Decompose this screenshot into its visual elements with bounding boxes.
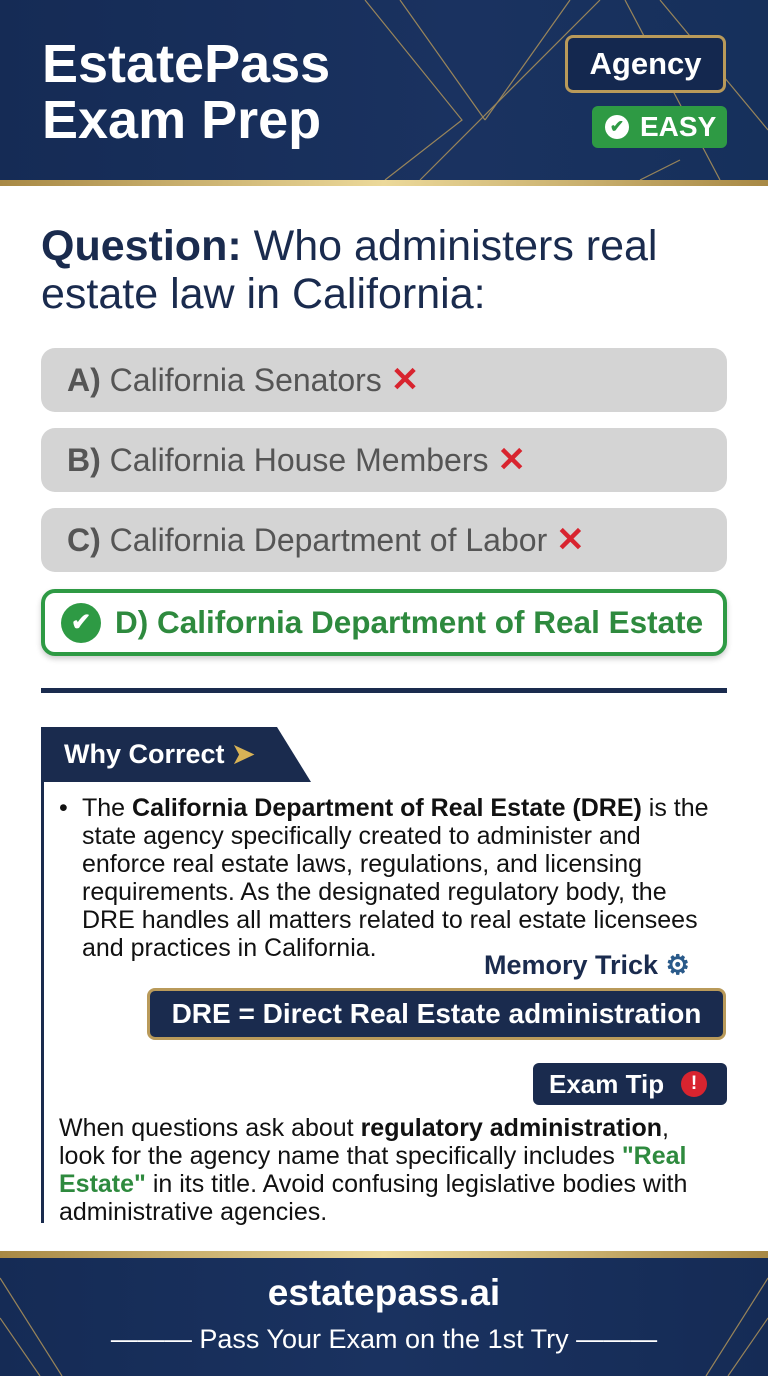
question xyxy=(41,222,657,318)
option A xyxy=(41,348,727,412)
text: explanation xyxy=(59,794,709,962)
badge: EASY xyxy=(592,106,727,148)
title: EstatePass xyxy=(42,34,330,94)
footer xyxy=(0,1258,768,1376)
text: exam tip: look for the agency name that specifically includes "Real xyxy=(59,1142,686,1170)
question: estate law in California: xyxy=(41,270,486,318)
text: exam tip: administrative agencies. xyxy=(59,1198,327,1226)
badge: Agency: Agency xyxy=(590,46,701,81)
text: exam tip: Estate" in its title. Avoid confusing legislative bodies with xyxy=(59,1170,687,1198)
exam tip badge xyxy=(533,1063,727,1105)
panel: why correct xyxy=(41,727,709,1223)
badge: EASY: EASY xyxy=(640,111,716,142)
memory trick heading: Memory Trick ⚙ xyxy=(484,950,690,980)
text: exam tip: When questions ask about regulatory administration, xyxy=(59,1114,669,1142)
option C xyxy=(41,508,727,572)
badge: Agency xyxy=(565,35,726,93)
option D correct xyxy=(41,589,727,656)
exam tip badge: Exam Tip xyxy=(549,1069,664,1099)
question: Question: Who administers real xyxy=(41,222,657,270)
memory trick box: DRE = Direct Real Estate administration xyxy=(172,998,701,1029)
text: explanation: requirements. As the designated regulatory body, the xyxy=(82,878,667,906)
title xyxy=(42,34,330,150)
memory trick box xyxy=(147,988,726,1040)
text: explanation: The California Department of Real Estate (DRE) is the xyxy=(82,794,709,822)
heading: Why Correct: Why Correct ➤ xyxy=(64,739,255,769)
badge: EASY: ✔ xyxy=(610,117,624,136)
header xyxy=(0,0,768,180)
text: explanation: • xyxy=(59,794,68,822)
option C: C) California Department of Labor ✕ xyxy=(67,521,585,559)
text: explanation: enforce real estate laws, regulations, and licensing xyxy=(82,850,642,878)
text: explanation: DRE handles all matters related to real estate licensees xyxy=(82,906,698,934)
footer url: estatepass.ai xyxy=(268,1272,500,1313)
text: explanation: state agency specifically created to administer and xyxy=(82,822,641,850)
text: exam tip xyxy=(59,1114,687,1226)
option A: A) California Senators ✕ xyxy=(67,361,419,399)
option B: B) California House Members ✕ xyxy=(67,441,526,479)
text: explanation: and practices in California. xyxy=(82,934,377,962)
title: Exam Prep xyxy=(42,90,321,150)
tagline: ——— Pass Your Exam on the 1st Try ——— xyxy=(111,1324,657,1354)
heading: Why Correct xyxy=(41,727,311,782)
option D correct: ✔ xyxy=(71,609,91,636)
exam tip badge: ! xyxy=(691,1073,697,1094)
option D correct: D) California Department of Real Estate xyxy=(115,604,703,640)
option B xyxy=(41,428,727,492)
